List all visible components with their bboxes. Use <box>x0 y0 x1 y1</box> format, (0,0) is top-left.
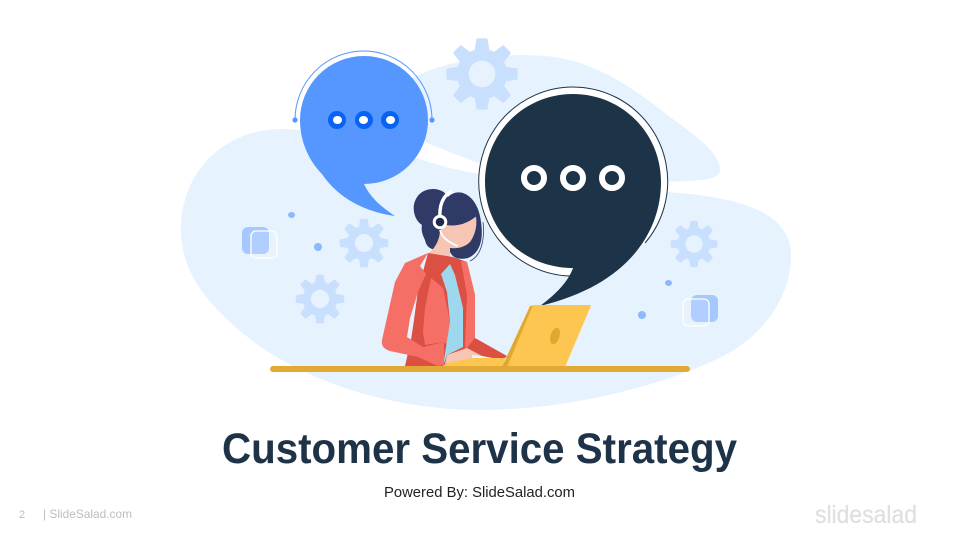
woman with headset <box>382 189 507 366</box>
jacket dark base <box>405 253 507 366</box>
icon: left gear <box>341 220 387 266</box>
page number: 2 <box>19 509 25 521</box>
footer text: | SlideSalad.com <box>43 507 132 521</box>
icon: lower left gear <box>297 276 343 322</box>
fringe <box>442 192 479 225</box>
icon: left squares <box>242 227 277 258</box>
jacket right panel <box>461 261 475 350</box>
dark speech bubble <box>478 87 668 306</box>
table <box>270 366 690 372</box>
subtitle: Powered By: SlideSalad.com <box>384 485 575 501</box>
icon: right gear <box>672 222 716 266</box>
jacket front panel <box>423 278 450 345</box>
neck and face <box>429 213 476 274</box>
hair <box>414 189 482 259</box>
blue speech bubble <box>292 51 435 216</box>
hand <box>445 348 482 364</box>
icon: right squares <box>683 295 718 326</box>
icon: large gear <box>448 40 516 108</box>
blouse <box>441 264 463 366</box>
logo: slidesalad <box>815 501 917 529</box>
title: Customer Service Strategy <box>222 425 737 473</box>
headset <box>434 191 458 246</box>
decorative dots <box>288 212 672 319</box>
hair strands <box>470 222 483 261</box>
background blob <box>181 55 791 410</box>
jacket sleeve <box>382 253 444 366</box>
laptop <box>445 305 591 367</box>
